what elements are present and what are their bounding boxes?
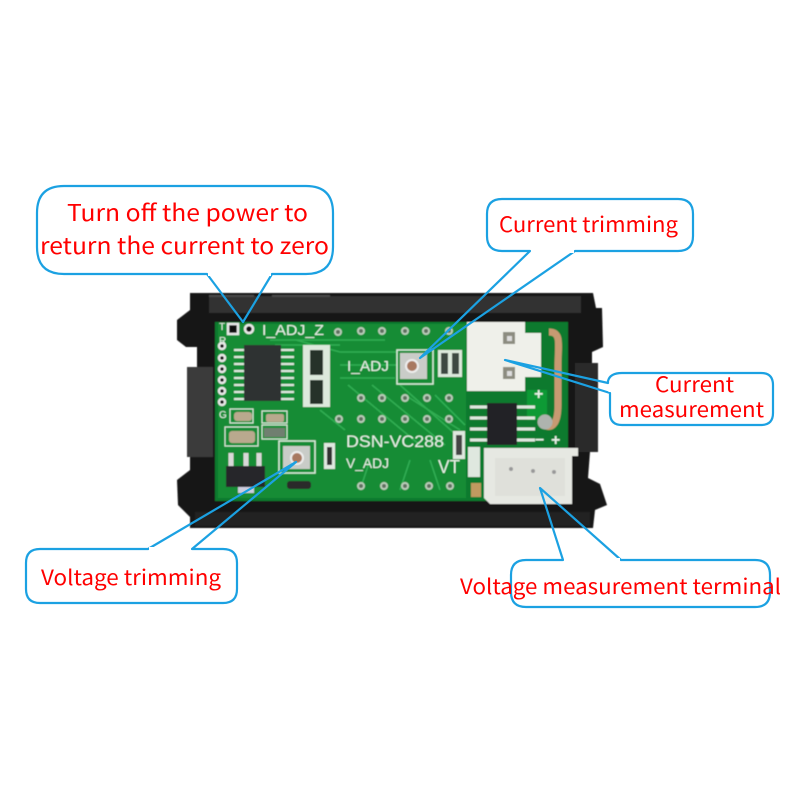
board silkscreen labels: R (219, 336, 226, 347)
board silkscreen labels: VT (438, 457, 460, 477)
callout: current trimming: Current trimming (499, 209, 678, 239)
board silkscreen labels (219, 322, 560, 477)
amplifier chip (470, 403, 535, 445)
voltage connector (484, 448, 578, 504)
board pins (335, 328, 453, 489)
callout: power off zero (37, 186, 333, 322)
voltage trimmer (279, 441, 315, 473)
board silkscreen labels: DSN-VC288 (346, 432, 444, 451)
callout: current measurement (505, 360, 773, 425)
meter module photo (177, 293, 607, 528)
board silkscreen labels: + (534, 386, 543, 403)
callout: current measurement: measurement (619, 394, 764, 424)
callout: voltage measurement terminal (460, 488, 781, 607)
callout: power off zero: Turn off the power to (67, 194, 308, 228)
copper shunt wire (538, 332, 559, 430)
voltage regulator (226, 453, 265, 493)
small parts near VT (453, 431, 481, 497)
header pads (219, 324, 253, 405)
callout: voltage trimming (26, 462, 296, 603)
resistor arrays (303, 345, 330, 407)
small capacitors (225, 409, 287, 446)
current trimmer (397, 350, 462, 384)
board silkscreen labels: I_ADJ (347, 359, 389, 375)
microcontroller chip (234, 345, 294, 401)
circuit board (215, 322, 568, 501)
current connector (467, 322, 541, 391)
board silkscreen labels: T (219, 322, 225, 333)
board silkscreen labels: + (551, 432, 560, 449)
board silkscreen labels: I_ADJ_Z (262, 322, 324, 339)
callout: current measurement: Current (655, 369, 734, 399)
callout: current trimming (420, 199, 693, 358)
callout: power off zero: return the current to zero (40, 227, 329, 261)
callout: voltage measurement terminal: Voltage measurement terminal (460, 571, 781, 601)
board silkscreen labels: G (219, 410, 227, 421)
resistor and diode (287, 443, 335, 489)
callout: voltage trimming: Voltage trimming (41, 562, 221, 592)
board silkscreen labels: − (535, 432, 544, 449)
meter housing (177, 293, 607, 528)
board silkscreen labels: V_ADJ (346, 455, 389, 471)
